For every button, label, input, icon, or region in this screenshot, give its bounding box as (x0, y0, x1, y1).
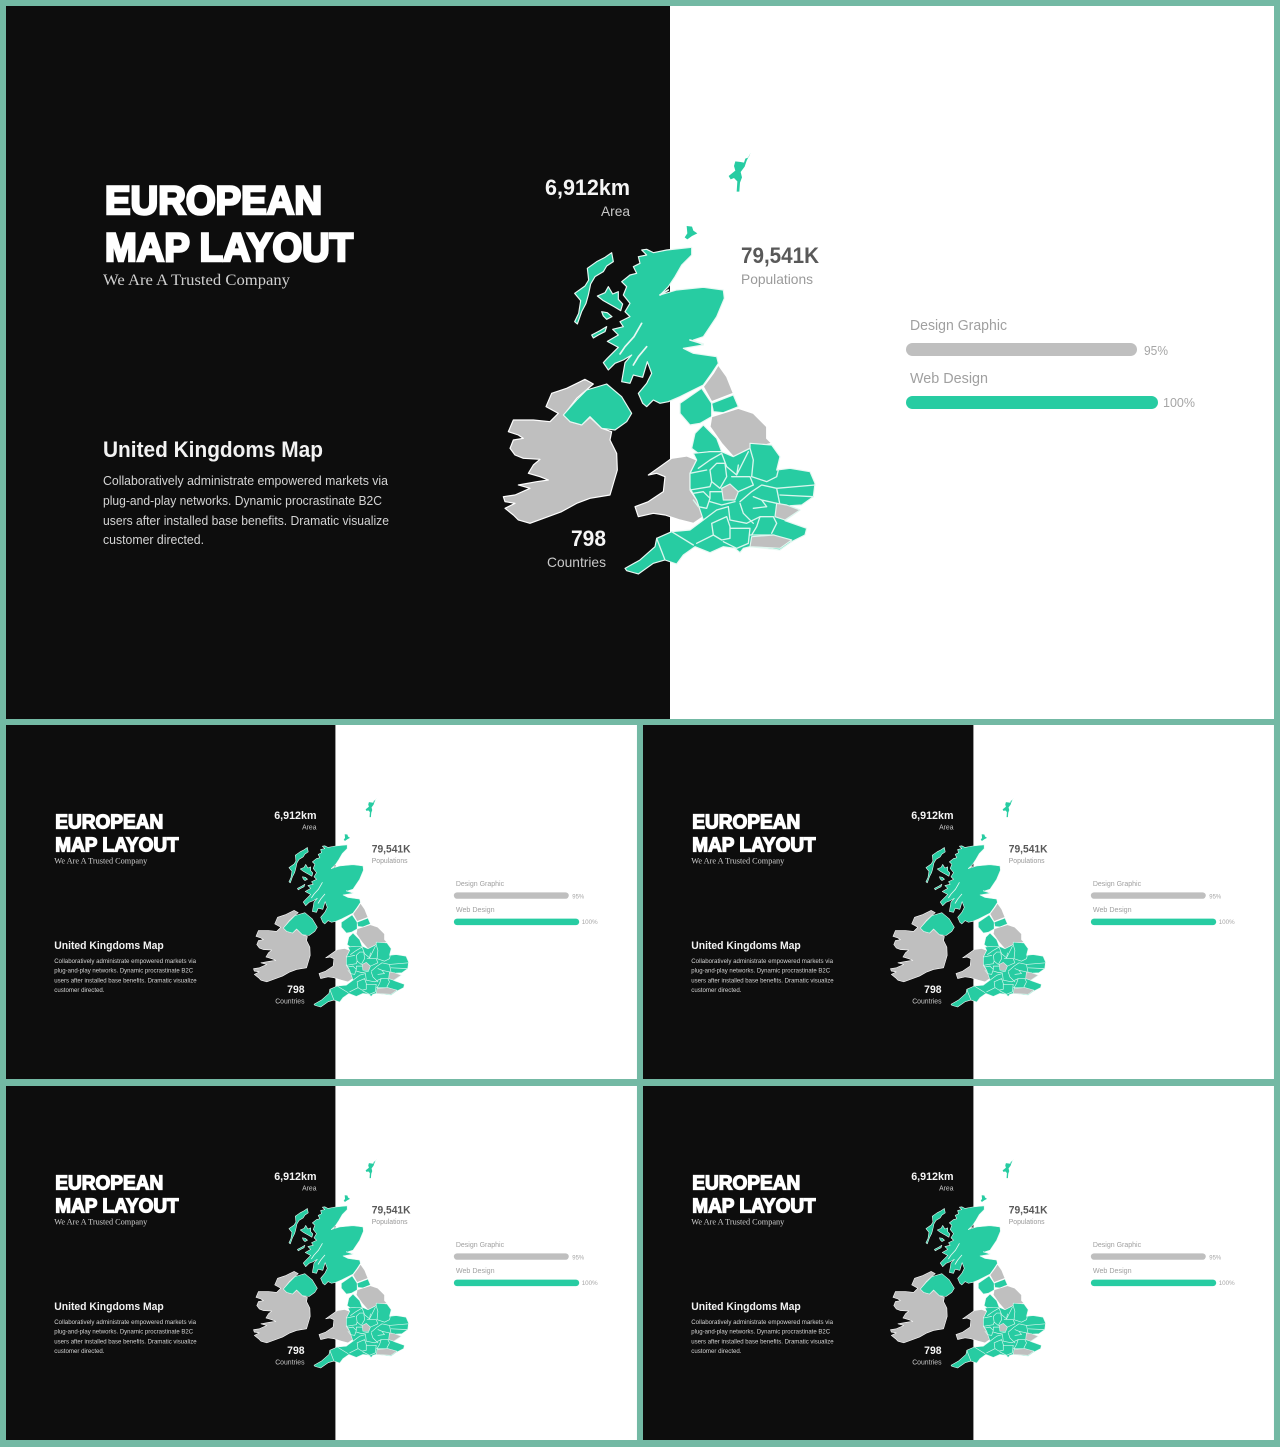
panel: small slide bottom left: 79,541K (372, 1205, 411, 1217)
panel: small slide top right: MAP LAYOUT (692, 835, 816, 857)
panel: small slide top left: We Are A Trusted Company (54, 857, 147, 866)
panel: small slide top right: 100% (1219, 919, 1235, 926)
Southern regions (503, 365, 815, 574)
panel: small slide top right: Web Design (1093, 905, 1132, 914)
panel: small slide top right: EUROPEAN (692, 811, 800, 833)
panel: small slide top left: 79,541K (372, 844, 411, 856)
panel: small slide bottom left: 798 (287, 1345, 305, 1357)
panel: small slide top right: Populations (1009, 858, 1045, 865)
panel: small slide top left: 95% (572, 893, 584, 900)
Sussex (750, 535, 792, 548)
panel: small slide top left: Countries (275, 999, 305, 1006)
panel: small slide bottom right: 79,541K (1009, 1205, 1048, 1217)
panel: small slide top left: 6,912km (274, 810, 317, 822)
Islay (592, 327, 607, 338)
panel: small slide bottom right: 100% (1219, 1280, 1235, 1287)
panel: small slide bottom left: 6,912km (274, 1171, 317, 1183)
panel: small slide top right: Area (939, 824, 954, 831)
panel: small slide top right: 798 (924, 984, 942, 996)
panel: small slide bottom right: Design Graphic (1093, 1240, 1141, 1249)
Northumberland (703, 365, 733, 402)
Republic of Ireland (503, 379, 617, 523)
panel: small slide bottom right (643, 1086, 1274, 1440)
panel: small slide bottom left: Area (302, 1185, 317, 1192)
panel: small slide top right: plug-and-play networks. Dynamic procrastinate B2C (691, 968, 831, 975)
panel: small slide bottom left: United Kingdoms Map (54, 1301, 164, 1313)
panel: small slide bottom right: MAP LAYOUT (692, 1196, 816, 1218)
panel: small slide top right: Design Graphic (1093, 879, 1141, 888)
Orkney (685, 226, 697, 239)
panel: small slide top right: 6,912km (911, 810, 954, 822)
panel: small slide top left: United Kingdoms Map (54, 940, 164, 952)
panel: small slide bottom right: EUROPEAN (692, 1172, 800, 1194)
progress: web design (906, 370, 1195, 410)
Cumbria (680, 388, 712, 425)
panel: small slide top left (6, 725, 637, 1079)
Shetland (729, 153, 751, 192)
panel: small slide bottom left: 95% (572, 1254, 584, 1261)
London and Essex area (775, 503, 800, 520)
map: United Kingdom and Ireland (503, 153, 815, 574)
panel: small slide bottom left: We Are A Trusted Company (54, 1218, 147, 1227)
title (105, 179, 353, 270)
panel: small slide bottom right: 95% (1209, 1254, 1221, 1261)
panel: small slide top left: customer directed. (54, 987, 105, 994)
panel: small slide bottom right: customer directed. (691, 1348, 742, 1355)
stat: area: 6,912km (545, 175, 630, 200)
panel: small slide top right: users after installed base benefits. Dramatic visualize (691, 978, 834, 985)
West Midlands (722, 484, 738, 500)
panel: small slide bottom right: users after installed base benefits. Dramatic visualize (691, 1339, 834, 1346)
body text (103, 474, 389, 547)
stat: countries: Countries (547, 554, 606, 570)
body text: plug-and-play networks. Dynamic procrastinate B2C (103, 494, 382, 508)
subtitle: We Are A Trusted Company (103, 272, 290, 289)
panel: small slide top left: MAP LAYOUT (55, 835, 179, 857)
panel: small slide bottom right: Web Design (1093, 1266, 1132, 1275)
body text: users after installed base benefits. Dramatic visualize (103, 514, 389, 528)
progress: design graphic (906, 317, 1168, 358)
panel: small slide bottom left (6, 1086, 637, 1440)
body text: customer directed. (103, 533, 204, 547)
stat: countries: 798 (571, 526, 606, 551)
Outer Hebrides (575, 253, 613, 324)
panel: small slide bottom right: Countries (912, 1360, 942, 1367)
Wales (635, 456, 703, 523)
Scotland (603, 247, 724, 407)
panel: small slide top left: Design Graphic (456, 879, 504, 888)
panel: small slide bottom left: customer directed. (54, 1348, 105, 1355)
Lancashire (692, 425, 722, 453)
panel: small slide bottom right: Area (939, 1185, 954, 1192)
stat: countries (547, 526, 606, 570)
Skye (597, 287, 623, 311)
panel: small slide bottom left: MAP LAYOUT (55, 1196, 179, 1218)
panel: small slide bottom left: EUROPEAN (55, 1172, 163, 1194)
panel: small slide bottom left: Design Graphic (456, 1240, 504, 1249)
panel: small slide top left: users after installed base benefits. Dramatic visualize (54, 978, 197, 985)
Durham (712, 395, 738, 413)
stat: populations: Populations (741, 271, 813, 287)
panel: small slide top left: Web Design (456, 905, 495, 914)
section heading: United Kingdoms Map (103, 437, 323, 462)
stat: populations (741, 243, 819, 287)
panel: small slide top left: EUROPEAN (55, 811, 163, 833)
body text: Collaboratively administrate empowered markets via (103, 474, 388, 488)
Northern Ireland (563, 384, 632, 430)
panel: small slide top left: 798 (287, 984, 305, 996)
panel: small slide top right (643, 725, 1274, 1079)
panel: small slide bottom left: users after installed base benefits. Dramatic visualize (54, 1339, 197, 1346)
England south (625, 443, 815, 574)
panel: small slide bottom right: plug-and-play networks. Dynamic procrastinate B2C (691, 1329, 831, 1336)
county boundaries (657, 448, 815, 560)
panel: small slide top right: We Are A Trusted Company (691, 857, 784, 866)
panel: small slide top right: United Kingdoms Map (691, 940, 801, 952)
panel: small slide bottom right: Collaboratively administrate empowered markets via (691, 1319, 834, 1326)
stat: area (545, 175, 630, 219)
panel: small slide top left: plug-and-play networks. Dynamic procrastinate B2C (54, 968, 194, 975)
panel: small slide bottom right: United Kingdoms Map (691, 1301, 801, 1313)
panel: small slide bottom left: Countries (275, 1360, 305, 1367)
white slide background (6, 6, 1274, 719)
title: EUROPEAN (105, 179, 322, 223)
Mull (602, 312, 612, 319)
panel: small slide bottom right: Populations (1009, 1219, 1045, 1226)
panel: small slide top left: Area (302, 824, 317, 831)
progress: design graphic: 95% (1144, 343, 1168, 358)
black left half (6, 6, 670, 719)
stat: populations: 79,541K (741, 243, 819, 268)
panel: small slide top left: 100% (582, 919, 598, 926)
panel: small slide top right: customer directed. (691, 987, 742, 994)
panel: small slide top right: 79,541K (1009, 844, 1048, 856)
panel: small slide top left: Collaboratively administrate empowered markets via (54, 958, 197, 965)
sea lochs (620, 290, 703, 365)
Yorkshire (710, 408, 772, 457)
panel: small slide bottom left: Collaboratively administrate empowered markets via (54, 1319, 197, 1326)
panel: small slide bottom right: 798 (924, 1345, 942, 1357)
panel: small slide top right: Countries (912, 999, 942, 1006)
panel: small slide top right: 95% (1209, 893, 1221, 900)
panel: small slide bottom left: 100% (582, 1280, 598, 1287)
panel: main slide (6, 6, 1274, 719)
panel: small slide bottom right: 6,912km (911, 1171, 954, 1183)
panel: small slide top right: Collaboratively administrate empowered markets via (691, 958, 834, 965)
panel: small slide bottom left: plug-and-play networks. Dynamic procrastinate B2C (54, 1329, 194, 1336)
panel: small slide bottom right: We Are A Trusted Company (691, 1218, 784, 1227)
progress: web design: Web Design (910, 370, 988, 387)
panel: small slide top left: Populations (372, 858, 408, 865)
progress: design graphic: Design Graphic (910, 317, 1007, 334)
panel: small slide bottom left: Populations (372, 1219, 408, 1226)
progress: web design: 100% (1163, 395, 1195, 410)
stat: area: Area (601, 203, 630, 219)
panel: small slide bottom left: Web Design (456, 1266, 495, 1275)
title: MAP LAYOUT (105, 226, 353, 270)
